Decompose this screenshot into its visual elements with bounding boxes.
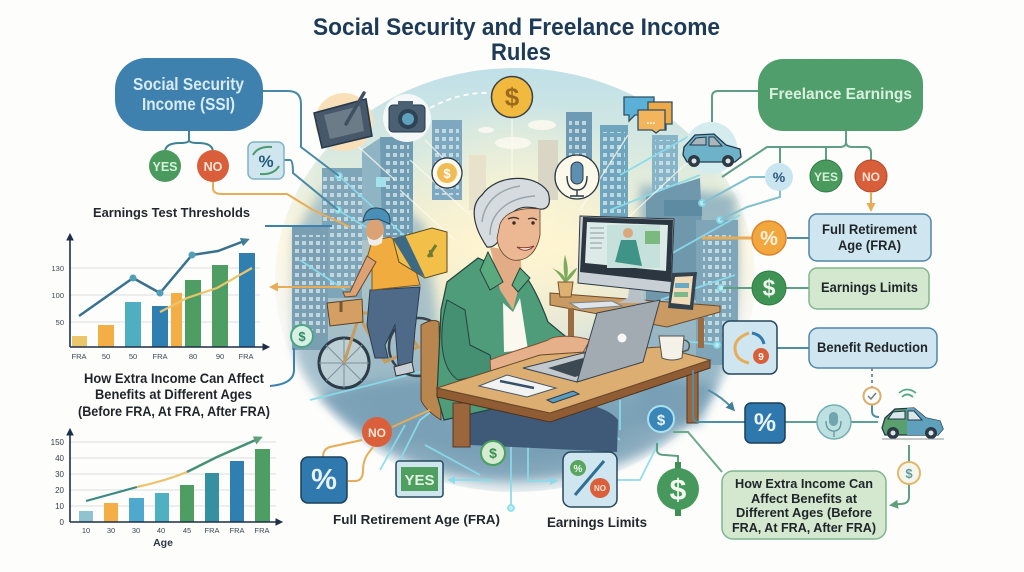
- connectors: left charts to scene: [265, 226, 350, 386]
- icon: dollar coin: $: [505, 82, 520, 112]
- laptop: [523, 300, 660, 382]
- neck: [490, 247, 522, 310]
- icon: drawing tablet: [314, 93, 373, 151]
- plant: [552, 255, 577, 297]
- illustration: delivery cyclist: [319, 208, 447, 388]
- row: full retirement age: Full Retirement: [822, 222, 917, 237]
- panel: chart benefits by age: 40: [157, 526, 165, 535]
- icon: chat bubbles: [624, 97, 672, 133]
- panel: social security income: Income (SSI): [142, 94, 235, 114]
- forearm and hands: [490, 336, 590, 377]
- row: earnings limits: Earnings Limits: [821, 280, 918, 295]
- percent circle: %: [773, 169, 786, 185]
- rider shirt: [366, 237, 420, 290]
- percent no icon: %: [574, 464, 583, 475]
- yes badge: YES: [152, 160, 178, 174]
- shirt body: [437, 258, 576, 420]
- central city scene: [250, 40, 780, 540]
- title: Rules: [491, 39, 551, 66]
- connector: camera to coin: [430, 93, 488, 108]
- percent circle: [765, 163, 793, 191]
- percent no icon: [563, 452, 617, 507]
- label: earnings limits: Earnings Limits: [547, 515, 647, 530]
- panel: chart benefits by age: 30: [132, 526, 140, 535]
- icon: car top: [683, 122, 741, 174]
- panel: social security income: Social Security: [133, 74, 244, 94]
- front wheel: [319, 338, 369, 388]
- monitor: [578, 216, 674, 303]
- green money tag: [657, 462, 699, 516]
- title: [313, 14, 720, 66]
- small tablet: [668, 272, 697, 310]
- rider head: [363, 208, 390, 246]
- percent box right: %: [754, 409, 776, 437]
- panel: how extra income callout: Different Ages (Before: [736, 506, 872, 520]
- icon: chat bubbles: ...: [646, 115, 656, 127]
- icon: small dollar: $: [298, 329, 306, 344]
- percent box right: [745, 403, 785, 443]
- title: Social Security and Freelance Income: [313, 14, 720, 41]
- rider legs: [367, 287, 420, 365]
- text: how extra income heading: (Before FRA, At FRA, After FRA): [78, 403, 270, 419]
- text: how extra income heading: [78, 370, 270, 419]
- panel: freelance earnings: [758, 59, 923, 131]
- panel: chart earnings test thresholds: [51, 205, 269, 361]
- panel: chart benefits by age: Age: [153, 537, 173, 549]
- panel: how extra income callout: How Extra Income Can: [735, 477, 873, 491]
- icon: coin bubble: $: [443, 166, 451, 181]
- panel: how extra income callout: Affect Benefits at: [751, 492, 858, 506]
- small dollar circle: [898, 462, 920, 484]
- phone: [547, 391, 579, 403]
- blue dollar node: $: [657, 412, 666, 429]
- panel: chart benefits by age: FRA: [254, 526, 270, 535]
- panel: freelance earnings: Freelance Earnings: [769, 86, 912, 103]
- panel: how extra income callout: [722, 471, 886, 539]
- percent box: %: [311, 464, 337, 496]
- panel: chart benefits by age: 45: [183, 526, 191, 535]
- no badge: [197, 150, 229, 182]
- illustration: chair: [421, 321, 441, 420]
- connectors: lower right: [657, 368, 909, 505]
- icon: small dollar: [291, 325, 313, 347]
- cargo box: [327, 299, 363, 326]
- panel: social security income: [115, 58, 263, 131]
- panel: chart benefits by age: 30: [55, 470, 65, 479]
- right buildings: [566, 112, 738, 365]
- row: earnings limits: $: [763, 275, 776, 301]
- text: how extra income heading: How Extra Income Can Affect: [84, 370, 264, 386]
- panel: chart benefits by age: 30: [107, 526, 115, 535]
- panel: how extra income callout: FRA, At FRA, After FRA): [732, 521, 876, 535]
- hair: [474, 178, 549, 247]
- lower scene shade: [320, 375, 715, 480]
- panel: chart earnings test thresholds: 50: [102, 352, 110, 361]
- delivery backpack: [393, 228, 447, 278]
- small dollar circle: $: [905, 466, 913, 481]
- panel: chart earnings test thresholds: FRA: [72, 352, 86, 361]
- clouds: [478, 120, 556, 149]
- icon: wifi signal: [899, 390, 916, 397]
- blue dollar node: [648, 406, 674, 432]
- yes badge right: [810, 160, 842, 192]
- side haze: [294, 175, 445, 445]
- icon: coin bubble: [432, 158, 462, 188]
- panel: chart benefits by age: [51, 429, 282, 549]
- yes box: YES: [404, 472, 435, 489]
- no badge right: NO: [862, 170, 880, 184]
- illustration: back desk and monitor: [550, 216, 720, 348]
- face: [497, 209, 540, 260]
- pants: [470, 400, 618, 452]
- illustration: woman at laptop: [437, 178, 618, 452]
- row: full retirement age: %: [760, 228, 778, 250]
- panel: chart benefits by age: FRA: [204, 526, 220, 535]
- dollar node: [481, 441, 505, 465]
- no badge bottom: NO: [368, 426, 386, 440]
- panel: chart benefits by age: 40: [55, 454, 65, 463]
- row: full retirement age: Age (FRA): [838, 238, 901, 253]
- panel: chart earnings test thresholds: 90: [216, 352, 224, 361]
- connectors: freelance box: [703, 91, 871, 220]
- yes badge: [149, 150, 181, 182]
- icon: camera: [383, 94, 431, 142]
- collar: [480, 252, 530, 292]
- icon: car bottom: [882, 408, 944, 439]
- panel: chart benefits by age: 10: [82, 526, 90, 535]
- yes badge right: YES: [814, 170, 838, 184]
- panel: chart benefits by age: 0: [60, 518, 65, 527]
- panel: chart benefits by age: 150: [51, 438, 65, 447]
- rider arm: [343, 256, 376, 297]
- text: how extra income heading: Benefits at Different Ages: [95, 386, 252, 402]
- no badge right: [855, 160, 887, 192]
- row: benefit reduction: [723, 321, 937, 374]
- white blouse: [503, 298, 528, 352]
- circuit lines: [300, 130, 740, 511]
- panel: chart earnings test thresholds: 130: [51, 264, 64, 273]
- panel: chart benefits by age: FRA: [230, 526, 244, 535]
- icon: microphone bubble: [555, 155, 599, 199]
- panel: chart earnings test thresholds: FRA: [238, 352, 254, 361]
- panel: chart earnings test thresholds: 50: [56, 318, 64, 327]
- percent no icon: NO: [594, 484, 606, 493]
- panel: chart earnings test thresholds: 80: [189, 352, 197, 361]
- green money tag: $: [670, 474, 687, 507]
- panel: chart earnings test thresholds: 50: [129, 352, 137, 361]
- arrow: no to fra: [870, 192, 872, 209]
- notebook: [479, 375, 556, 397]
- no badge bottom: [362, 417, 392, 447]
- panel: chart earnings test thresholds: FRA: [152, 352, 168, 361]
- icon: dollar coin: [492, 76, 532, 118]
- icon: percent cycle: [248, 142, 284, 179]
- label: full retirement age: Full Retirement Age (FRA): [333, 512, 500, 527]
- heading: Earnings Test Thresholds: [93, 205, 250, 220]
- rear wheel: [389, 318, 447, 376]
- percent box: [301, 457, 347, 503]
- left buildings: [292, 120, 558, 350]
- sleeve: [442, 300, 493, 380]
- connectors: social security box: [165, 91, 350, 227]
- yes box: [396, 461, 443, 497]
- panel: chart benefits by age: 10: [55, 502, 65, 511]
- icon: percent cycle: %: [258, 152, 274, 171]
- illustration: front desk: [437, 300, 710, 447]
- connectors: no badge to percent: [323, 410, 430, 481]
- row: earnings limits: [723, 268, 929, 309]
- row: full retirement age: [702, 214, 931, 261]
- no badge: NO: [204, 160, 223, 174]
- check circle: [864, 388, 880, 404]
- microphone circle: [817, 405, 851, 439]
- dollar node: $: [489, 445, 497, 461]
- coffee cup: [659, 336, 689, 360]
- row: benefit reduction: 9: [758, 352, 764, 363]
- panel: chart benefits by age: 20: [55, 486, 65, 495]
- radiating lines: [340, 118, 690, 240]
- panel: chart earnings test thresholds: 100: [51, 291, 64, 300]
- row: benefit reduction: Benefit Reduction: [817, 340, 928, 355]
